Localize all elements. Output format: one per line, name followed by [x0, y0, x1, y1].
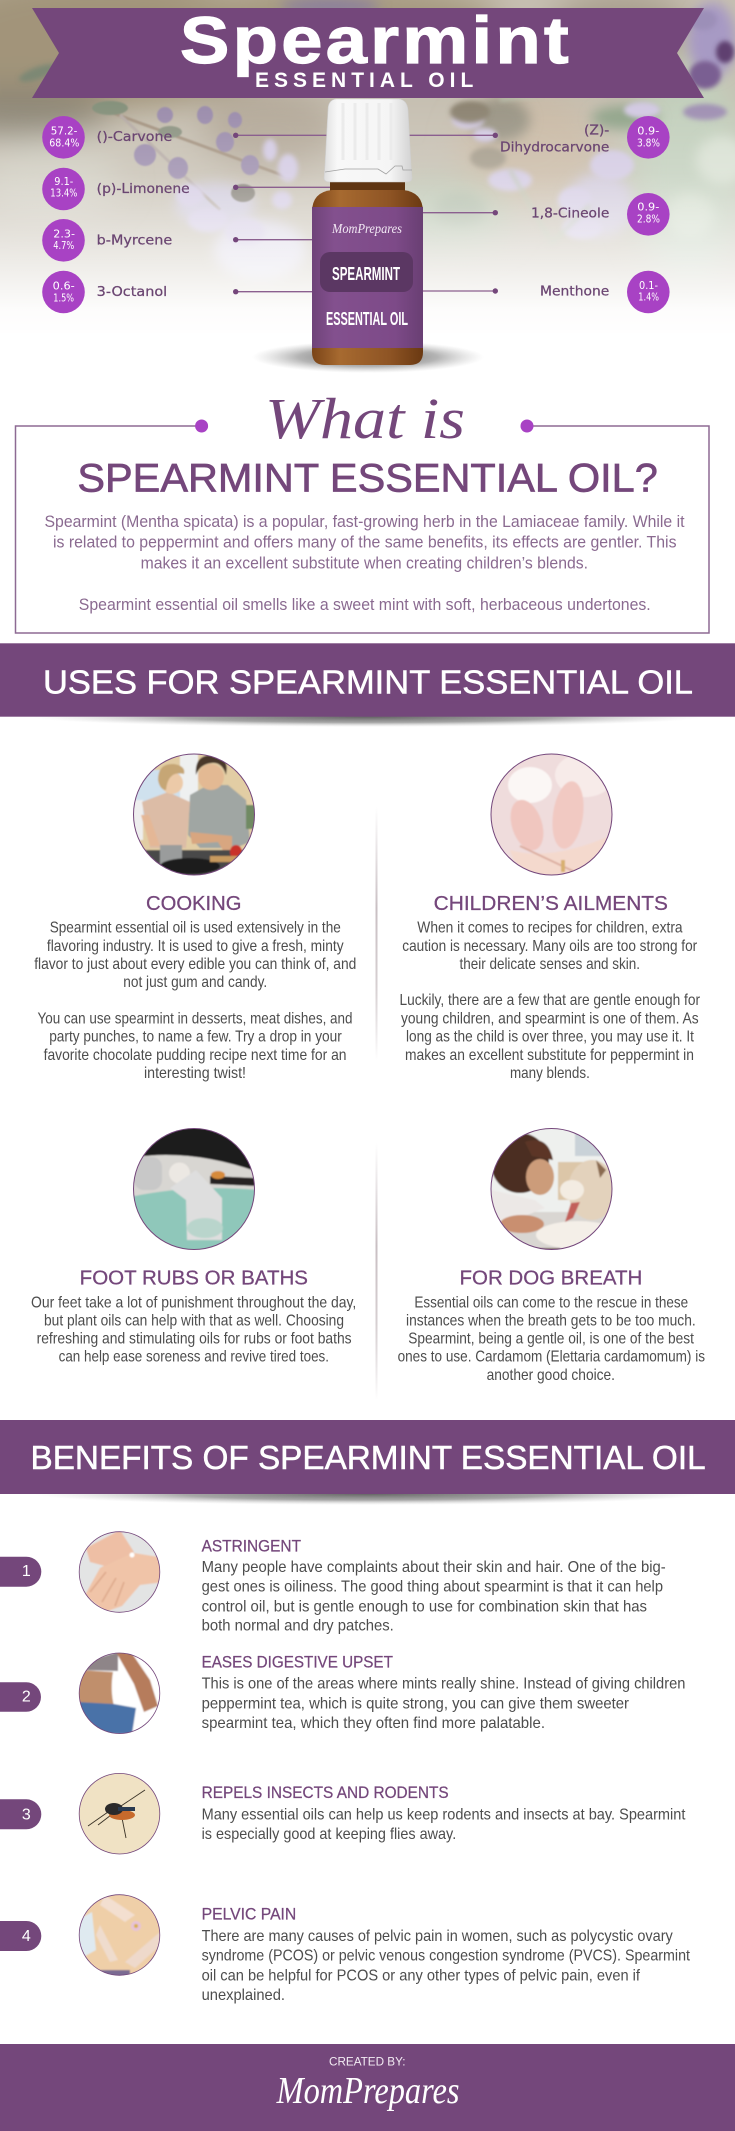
description text: Spearmint essential oil smells like a sweet mint with soft, herbaceous undertones. [79, 595, 651, 614]
benefit 4: pelvic pain: There are many causes of pelvic pain in women, such as polycystic ovary [202, 1928, 673, 1945]
compound: (-)-Carvone: ()-Carvone [97, 129, 172, 145]
benefit 4: pelvic pain [0, 1894, 690, 2004]
number tab 1: 1 [22, 1563, 31, 1580]
description text: Spearmint (Mentha spicata) is a popular, fast-growing herb in the Lamiaceae family. While it [44, 512, 685, 531]
use: dog breath: FOR DOG BREATH [460, 1268, 642, 1290]
use: foot rubs or baths: but plant oils can help with that as well. Choosing [44, 1312, 344, 1329]
connector lines from compounds to bottle [233, 133, 498, 294]
section band: benefits: BENEFITS OF SPEARMINT ESSENTIAL OIL [30, 1439, 706, 1476]
compound: 3-Octanol: 3-Octanol [97, 284, 167, 300]
panel: what is spearmint essential oil [16, 386, 709, 633]
use: foot rubs or baths: Our feet take a lot of punishment throughout the day, [31, 1294, 356, 1311]
compound: Menthone: 0.1- [639, 280, 658, 292]
photo: mosquito on skin [78, 1772, 162, 1856]
use: cooking: flavor to just about every edible you can think of, and [34, 956, 356, 973]
compound: (Z)-Dihydrocarvone: 0.9- [637, 126, 660, 138]
compound: b-Myrcene: 2.3- [53, 228, 75, 240]
compound: b-Myrcene [42, 219, 172, 262]
section band: benefits [0, 1420, 735, 1505]
compound: b-Myrcene: 4.7% [53, 240, 74, 252]
compound: 3-Octanol: 0.6- [53, 280, 75, 292]
benefit 3: repels insects and rodents: Many essential oils can help us keep rodents and insects at bay. Spearmint [202, 1806, 686, 1823]
benefit 1: astringent: both normal and dry patches. [202, 1618, 394, 1635]
description text: makes it an excellent substitute when creating children’s blends. [141, 553, 588, 572]
benefit 1: astringent: Many people have complaints about their skin and hair. One of the big- [202, 1559, 666, 1576]
use: dog breath [398, 1125, 705, 1384]
divider [376, 807, 378, 1060]
use: children's ailments [400, 750, 701, 1082]
use: children's ailments: long as the child is over three, you may use it. It [406, 1029, 694, 1046]
compound: (Z)-Dihydrocarvone: 3.8% [637, 138, 660, 150]
use: foot rubs or baths [31, 1125, 356, 1366]
number tab 2: 2 [22, 1689, 31, 1706]
compound: Limonene: 9.1- [54, 176, 73, 188]
photo: woman with husky dog [490, 1128, 612, 1250]
icon: essential oil bottle: ESSENTIAL OIL [326, 309, 408, 329]
compound: (Z)-Dihydrocarvone: (Z)- [584, 122, 609, 138]
use: dog breath: Spearmint, being a gentle oil, is one of the best [408, 1331, 694, 1348]
use: dog breath: another good choice. [487, 1367, 615, 1384]
compound: (-)-Carvone: 68.4% [49, 138, 79, 150]
use: cooking: You can use spearmint in desserts, meat dishes, and [38, 1010, 352, 1027]
use: cooking: COOKING [146, 893, 242, 915]
header photo: blurred flowering spearmint [0, 0, 735, 300]
photo: hand with cream [78, 1530, 165, 1614]
benefit 4: pelvic pain: oil can be helpful for PCOS or any other types of pelvic pain, even if [202, 1967, 641, 1984]
compound: Menthone: 1.4% [638, 292, 659, 304]
benefit 1: astringent: gest ones is oiliness. The good thing about spearmint is that it can help [202, 1579, 663, 1596]
number tab 3 [0, 1799, 41, 1829]
footer [0, 2044, 735, 2131]
use: children's ailments: many blends. [510, 1065, 590, 1082]
footer: CREATED BY: [329, 2055, 406, 2069]
bottle label text: MomPrepares [331, 222, 402, 237]
use: cooking: flavoring industry. It is used to give a fresh, minty [47, 938, 344, 955]
benefit 4: pelvic pain: syndrome (PCOS) or pelvic venous congestion syndrome (PVCS). Spearmint [202, 1948, 690, 1965]
benefit 3: repels insects and rodents: REPELS INSECTS AND RODENTS [202, 1784, 449, 1802]
photo: hands on belly with flower [78, 1894, 162, 1978]
icon: essential oil bottle: SPEARMINT [332, 264, 400, 284]
use: cooking: party punches, to name a few. Try a drop in your [49, 1029, 342, 1046]
use: foot rubs or baths: FOOT RUBS OR BATHS [80, 1268, 308, 1290]
benefit 2: eases digestive upset [0, 1650, 685, 1736]
number tab 2 [0, 1682, 41, 1712]
compound: 3-Octanol [42, 271, 167, 313]
use: dog breath: instances when the breath gets to be too much. [406, 1312, 696, 1329]
use: cooking: Spearmint essential oil is used extensively in the [50, 920, 341, 937]
title: Spearmint: Spearmint [180, 3, 572, 77]
photo: baby feet in hands [490, 750, 615, 880]
use: children's ailments: their delicate senses and skin. [460, 956, 640, 973]
footer: MomPrepares [276, 2070, 460, 2112]
compound: 1,8-Cineole: 1,8-Cineole [531, 206, 609, 222]
description text [44, 512, 685, 614]
compound: Menthone [540, 271, 670, 313]
script heading: What is: What is [265, 386, 465, 451]
subtitle: Essential Oil: ESSENTIAL OIL [255, 69, 478, 92]
benefit 2: eases digestive upset: This is one of the areas where mints really shine. Instead of giving children [202, 1676, 685, 1693]
use: cooking: interesting twist! [144, 1065, 246, 1082]
heading: SPEARMINT ESSENTIAL OIL? [77, 457, 658, 501]
use: cooking [34, 750, 356, 1082]
benefit 4: pelvic pain: unexplained. [202, 1987, 285, 2004]
compound: (Z)-Dihydrocarvone: Dihydrocarvone [500, 140, 609, 156]
section band: uses [0, 643, 735, 727]
use: children's ailments: When it comes to recipes for children, extra [417, 920, 683, 937]
benefit 1: astringent: control oil, but is gentle enough to use for combination skin that has [202, 1598, 647, 1615]
number tab 4 [0, 1921, 41, 1951]
use: dog breath: Essential oils can come to the rescue in these [414, 1294, 688, 1311]
section band: uses: USES FOR SPEARMINT ESSENTIAL OIL [43, 663, 693, 700]
photo: waist and loose jeans [78, 1650, 162, 1736]
compound: Limonene: 13.4% [50, 188, 77, 200]
benefit 3: repels insects and rodents: is especially good at keeping flies away. [202, 1826, 456, 1843]
compound: Limonene [42, 168, 190, 210]
compound: 3-Octanol: 1.5% [53, 293, 74, 305]
compound: 1,8-Cineole: 0.9- [637, 202, 660, 214]
compound: (-)-Carvone [42, 116, 172, 159]
benefit 3: repels insects and rodents [0, 1772, 686, 1856]
compound: (-)-Carvone: 57.2- [51, 126, 78, 138]
benefit 1: astringent: ASTRINGENT [202, 1538, 301, 1556]
title banner [32, 3, 704, 98]
use: children's ailments: makes an excellent substitute for peppermint in [405, 1047, 694, 1064]
photo: bath with towels [133, 1128, 255, 1250]
benefit 2: eases digestive upset: peppermint tea, which is quite strong, you can give them sweeter [202, 1695, 630, 1712]
use: cooking: not just gum and candy. [123, 974, 267, 991]
benefit 4: pelvic pain: PELVIC PAIN [202, 1905, 296, 1923]
use: foot rubs or baths: can help ease soreness and revive tired toes. [59, 1349, 329, 1366]
description text: is related to peppermint and offers many of the same benefits, its effects are gentler. This [53, 533, 676, 552]
compound: (Z)-Dihydrocarvone [500, 116, 670, 159]
benefit 2: eases digestive upset: spearmint tea, which they often find more palatable. [202, 1715, 545, 1732]
photo: couple cooking [133, 754, 255, 876]
benefit 2: eases digestive upset: EASES DIGESTIVE UPSET [202, 1653, 393, 1671]
use: cooking: favorite chocolate pudding recipe next time for an [44, 1047, 346, 1064]
compound: b-Myrcene: b-Myrcene [97, 233, 172, 249]
compound: Menthone: Menthone [540, 283, 609, 299]
benefit 1: astringent [0, 1530, 666, 1635]
compound: Limonene: (p)-Limonene [97, 181, 190, 197]
number tab 4: 4 [22, 1928, 31, 1945]
compound: 1,8-Cineole [531, 193, 670, 236]
number tab 1 [0, 1557, 41, 1587]
icon: essential oil bottle [252, 99, 484, 373]
number tab 3: 3 [22, 1806, 31, 1823]
use: children's ailments: CHILDREN’S AILMENTS [434, 893, 668, 915]
compound: 1,8-Cineole: 2.8% [637, 214, 660, 226]
use: foot rubs or baths: refreshing and stimulating oils for rubs or foot baths [37, 1331, 352, 1348]
